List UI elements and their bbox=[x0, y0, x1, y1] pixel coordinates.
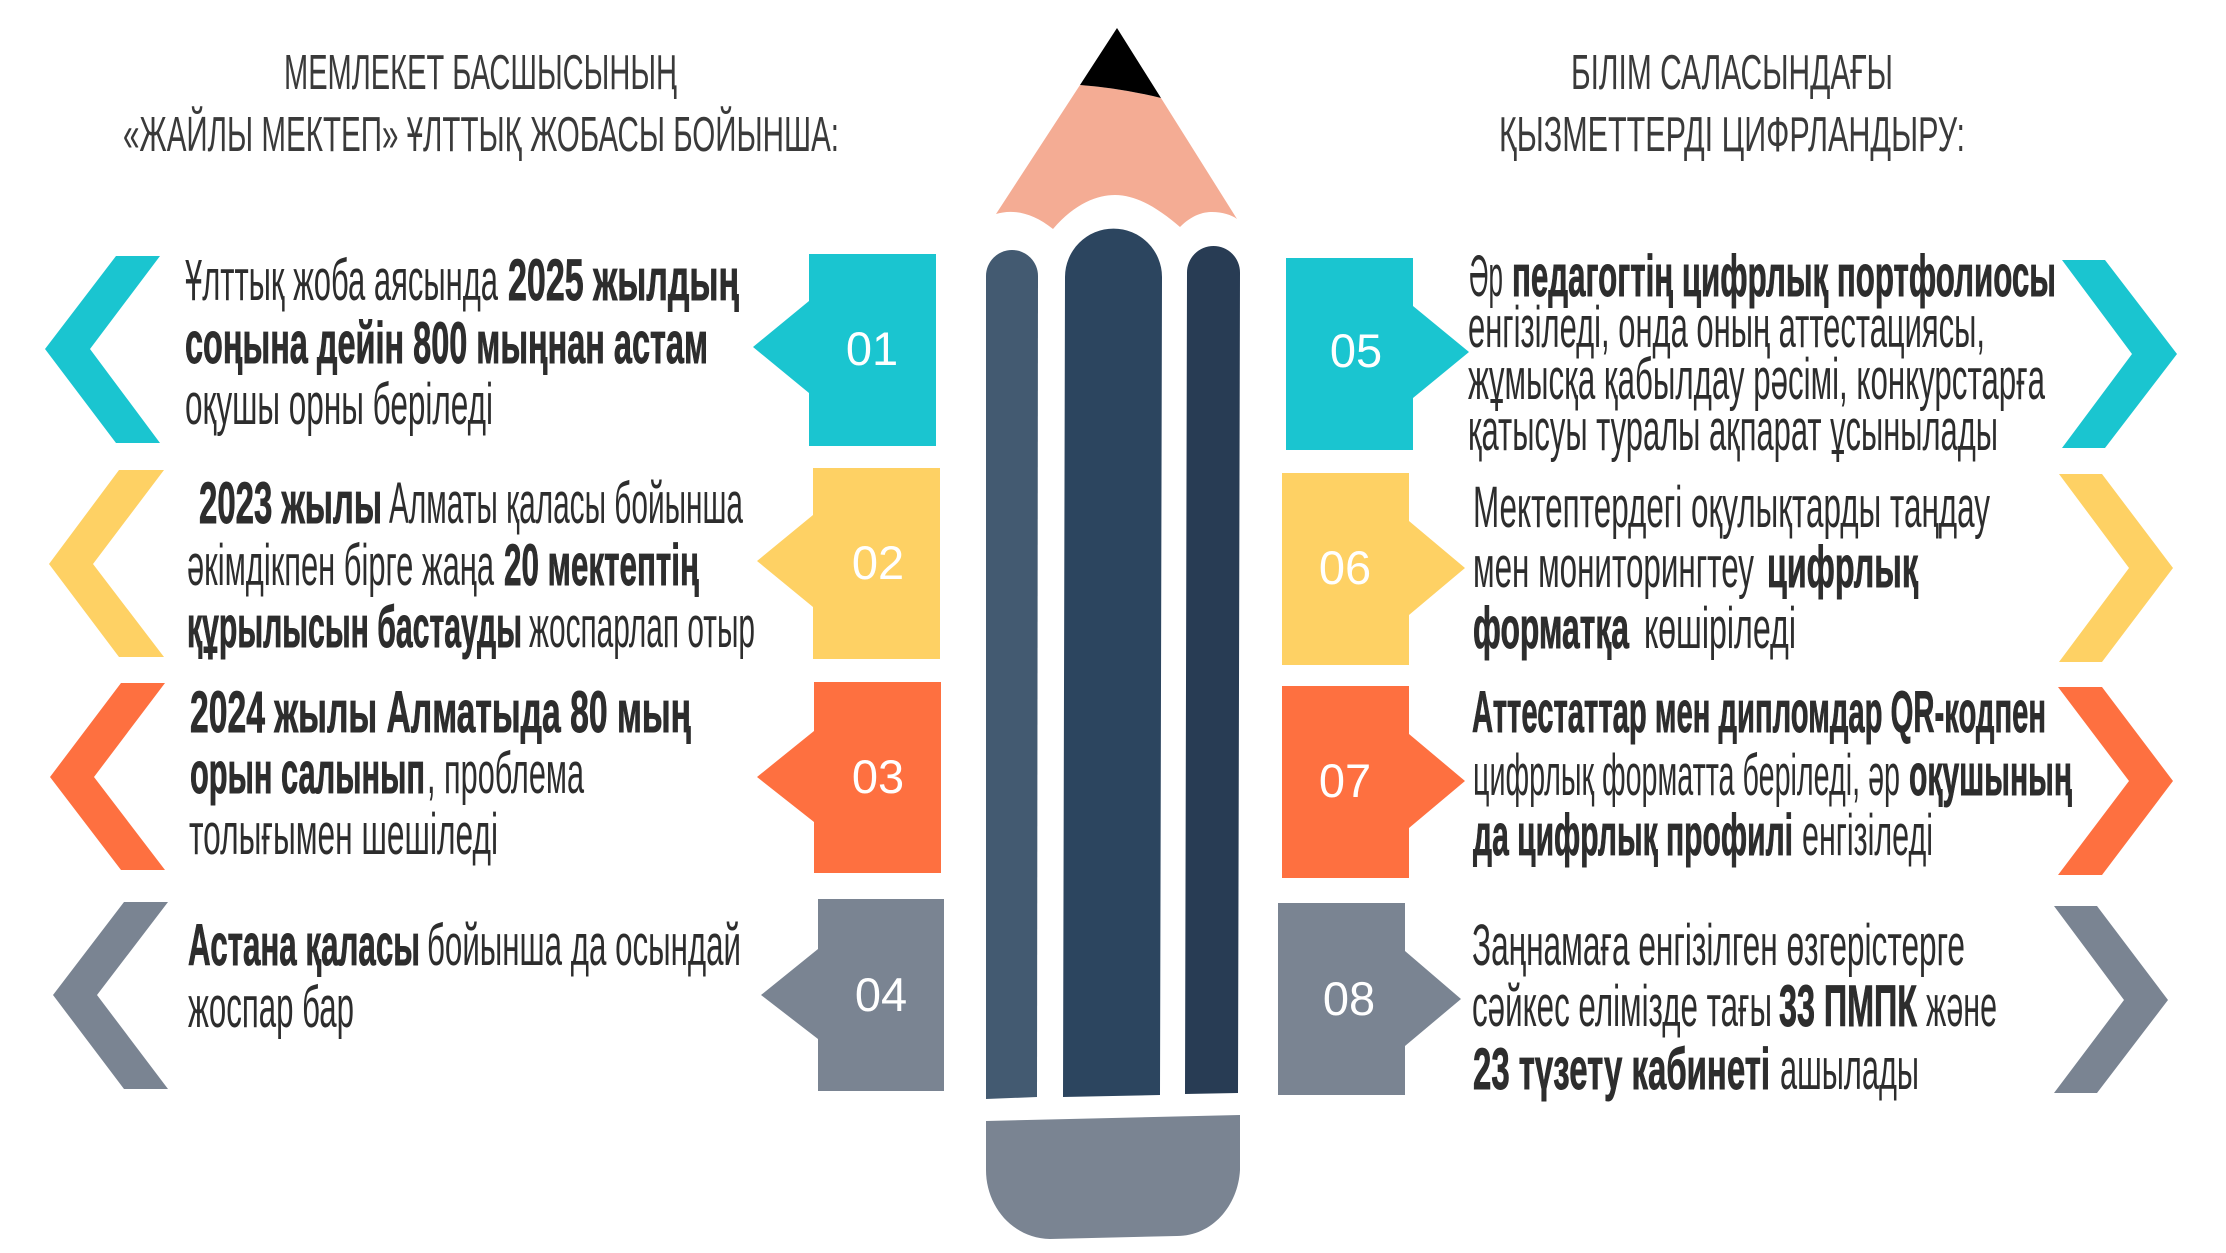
chevron 02 bbox=[49, 470, 164, 657]
text 01: 2025 жылдың bbox=[508, 248, 739, 313]
text 08: ашылады bbox=[1780, 1037, 1919, 1102]
text 02: жоспарлап отыр bbox=[529, 595, 755, 660]
text 07: да цифрлық профилі bbox=[1473, 803, 1793, 868]
pencil illustration bbox=[986, 28, 1240, 1239]
text 05 bbox=[1468, 244, 2056, 463]
text 04: Астана қаласы bbox=[188, 913, 420, 978]
number box 04 bbox=[761, 899, 944, 1091]
number box 08 bbox=[1278, 903, 1461, 1095]
number 03: 03 bbox=[852, 750, 904, 803]
text 05: Әр bbox=[1469, 244, 1503, 309]
text 02: құрылысын бастауды bbox=[187, 595, 522, 660]
text 08: және bbox=[1926, 974, 1997, 1039]
text 04: бойынша да осындай bbox=[427, 913, 741, 978]
text 03: орын салынып bbox=[190, 741, 425, 806]
text 03: , проблема bbox=[427, 741, 584, 806]
heading: left: «ЖАЙЛЫ МЕКТЕП» ҰЛТТЫҚ ЖОБАСЫ БОЙЫНША: bbox=[123, 107, 839, 162]
text 01: оқушы орны беріледі bbox=[185, 372, 493, 437]
pencil graphite point bbox=[1080, 28, 1161, 98]
text 07: енгізіледі bbox=[1802, 803, 1933, 868]
pencil left stripe bbox=[986, 250, 1038, 1099]
text 02: әкімдікпен бірге жаңа bbox=[187, 533, 494, 598]
text 06: форматқа bbox=[1473, 596, 1629, 661]
number box 07 bbox=[1282, 686, 1465, 878]
text 04: жоспар бар bbox=[188, 975, 354, 1040]
chevron 03 bbox=[50, 683, 165, 870]
item 01 bbox=[45, 248, 936, 446]
text 03: 2024 жылы Алматыда 80 мың bbox=[190, 680, 691, 745]
heading: right bbox=[1499, 46, 1965, 162]
heading: right: БІЛІМ САЛАСЫНДАҒЫ bbox=[1571, 46, 1893, 100]
pencil middle stripe bbox=[1063, 229, 1162, 1097]
text 01: Ұлттық жоба аясында bbox=[185, 248, 498, 313]
item 03 bbox=[50, 680, 941, 873]
item 04 bbox=[53, 899, 944, 1091]
text 03: толығымен шешіледі bbox=[189, 802, 498, 867]
number 01: 01 bbox=[846, 322, 898, 375]
pencil eraser bbox=[986, 1115, 1240, 1239]
number 05: 05 bbox=[1330, 324, 1382, 377]
pencil wood tip bbox=[996, 85, 1237, 229]
number box 06 bbox=[1282, 473, 1465, 665]
text 08: 33 ПМПК bbox=[1779, 974, 1917, 1039]
chevron 06 bbox=[2059, 474, 2173, 662]
text 03 bbox=[189, 680, 691, 867]
text 06: цифрлық bbox=[1767, 535, 1919, 600]
number 07: 07 bbox=[1319, 754, 1371, 807]
text 08 bbox=[1472, 913, 1997, 1102]
number box 03 bbox=[757, 682, 941, 873]
text 02: 20 мектептің bbox=[504, 533, 699, 598]
number box 05 bbox=[1286, 258, 1469, 450]
item 06 bbox=[1282, 473, 2173, 665]
number 02: 02 bbox=[852, 536, 904, 589]
heading: left: МЕМЛЕКЕТ БАСШЫСЫНЫҢ bbox=[284, 46, 677, 100]
number box 02 bbox=[757, 468, 940, 659]
number 08: 08 bbox=[1323, 972, 1375, 1025]
heading: left bbox=[123, 46, 839, 162]
text 02: 2023 жылы bbox=[199, 471, 382, 536]
chevron 07 bbox=[2058, 687, 2173, 875]
text 07: оқушының bbox=[1909, 743, 2072, 808]
item 02 bbox=[49, 468, 940, 660]
text 04 bbox=[188, 913, 741, 1040]
text 06 bbox=[1473, 475, 1990, 661]
item 05 bbox=[1286, 244, 2177, 463]
number 04: 04 bbox=[855, 968, 907, 1021]
text 08: 23 түзету кабинеті bbox=[1473, 1037, 1770, 1102]
item 08 bbox=[1278, 903, 2168, 1102]
chevron 05 bbox=[2062, 260, 2177, 448]
heading: right: ҚЫЗМЕТТЕРДІ ЦИФРЛАНДЫРУ: bbox=[1499, 108, 1965, 162]
text 01: соңына дейін 800 мыңнан астам bbox=[185, 311, 708, 376]
chevron 01 bbox=[45, 256, 160, 443]
number 06: 06 bbox=[1319, 541, 1371, 594]
text 07 bbox=[1472, 680, 2072, 868]
pencil right stripe bbox=[1185, 246, 1240, 1094]
text 06: көшіріледі bbox=[1644, 596, 1796, 661]
number box 01 bbox=[753, 254, 936, 446]
text 08: сәйкес елімізде тағы bbox=[1472, 974, 1772, 1039]
chevron 04 bbox=[53, 902, 168, 1089]
chevron 08 bbox=[2054, 906, 2168, 1093]
text 06: мен мониторингтеу bbox=[1473, 535, 1754, 600]
text 02 bbox=[187, 471, 755, 660]
item 07 bbox=[1282, 680, 2173, 878]
text 02: Алматы қаласы бойынша bbox=[389, 471, 743, 536]
text 01 bbox=[185, 248, 739, 437]
